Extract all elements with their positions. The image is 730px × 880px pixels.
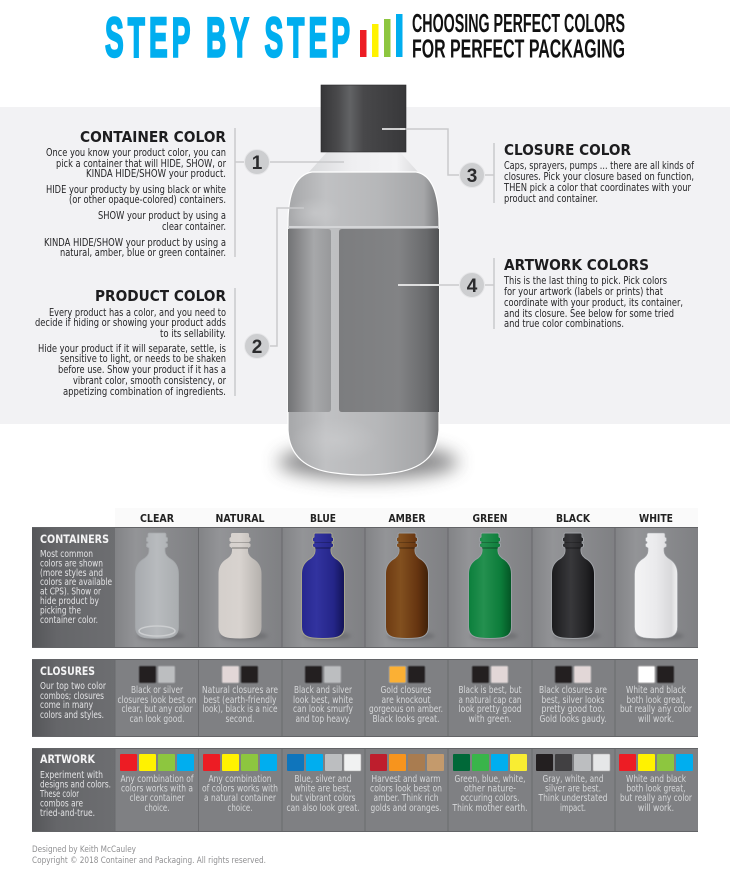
panel: closures row	[32, 659, 698, 737]
artwork cell: clear: Any combination of	[120, 774, 194, 785]
divider	[234, 288, 236, 396]
containers intro	[40, 532, 112, 626]
body text: product and container.	[504, 193, 598, 205]
callout lines	[235, 129, 494, 346]
column headers	[115, 508, 698, 527]
closure cell: white: White and black	[626, 685, 686, 696]
artwork cell: black: silver are best.	[545, 784, 601, 794]
body text: This is the last thing to pick. Pick colors	[503, 275, 667, 287]
right label	[339, 229, 439, 412]
artwork cell: amber	[370, 754, 444, 814]
artwork cell: amber: amber. Think rich	[374, 793, 438, 804]
body text: KINDA HIDE/SHOW your product.	[86, 168, 226, 180]
heading: ARTWORK COLORS	[504, 256, 649, 274]
closures intro: Our top two color	[40, 681, 106, 692]
closure cell: black	[539, 666, 607, 725]
closure cell: clear	[118, 666, 196, 725]
body text: KINDA HIDE/SHOW your product by using a	[44, 237, 226, 249]
body text: coordinate with your product, its container,	[504, 297, 683, 309]
containers intro: Most common	[40, 549, 93, 560]
artwork cell: clear: clear container	[130, 793, 185, 804]
body text: and its closure. See below for some tried	[504, 308, 674, 320]
column headers: BLACK	[556, 513, 591, 525]
artwork cell: blue	[286, 754, 361, 814]
body text	[44, 147, 227, 259]
closure cell: black: Gold looks gaudy.	[540, 714, 606, 725]
artwork cell: white: both look great,	[626, 784, 686, 794]
artwork cell: blue: Blue, silver and	[294, 774, 352, 785]
closure cell: blue	[293, 666, 353, 725]
artwork cell: green	[452, 754, 528, 814]
bottle illustration	[278, 85, 458, 479]
closure cell: blue: look best, white	[293, 695, 353, 706]
bottle neck	[309, 152, 418, 172]
artwork cell: white	[619, 754, 693, 814]
containers intro: picking the	[40, 606, 81, 616]
artwork intro: tried-and-true.	[40, 808, 95, 819]
closure cell: natural: second.	[226, 714, 254, 725]
artwork cell: white: White and black	[626, 774, 686, 785]
body text: before use. Show your product if it has a	[58, 364, 226, 376]
artwork cell: green: Think mother earth.	[452, 803, 528, 814]
body text: sensitive to light, or needs to be shaken	[60, 353, 226, 365]
artwork cell: amber: Harvest and warm	[372, 774, 440, 785]
closure cell: amber: gorgeous on amber.	[369, 704, 443, 715]
artwork cell: black	[536, 754, 610, 814]
artwork cell: clear: choice.	[144, 803, 170, 814]
icon: color bars	[360, 14, 402, 57]
closure cell: white: will work.	[638, 714, 674, 725]
bottle: amber	[386, 533, 435, 640]
closure cell: blue: can look smurfy	[293, 704, 353, 715]
column headers: WHITE	[639, 513, 673, 525]
bottle body	[288, 172, 439, 475]
closure cell: natural: best (earth-friendly	[204, 695, 277, 706]
bottle: white	[634, 533, 684, 640]
closure cell: white: both look great,	[626, 695, 686, 706]
body text: HIDE your producty by using black or white	[46, 184, 226, 196]
footer credits	[32, 845, 266, 866]
body text: for your artwork (labels or prints) that	[504, 286, 663, 298]
artwork cell: clear	[120, 754, 194, 814]
panel: container color	[44, 128, 270, 259]
artwork cell: natural: of colors works with	[202, 784, 278, 794]
closures intro: colors and styles.	[40, 710, 104, 721]
closure cell: green: Black is best, but	[458, 685, 522, 696]
subtitle	[412, 10, 625, 64]
marker 1	[244, 150, 270, 174]
marker 3: 3	[467, 166, 477, 187]
body text: decide if hiding or showing your product adds	[35, 317, 226, 329]
panel: product color	[35, 287, 270, 398]
heading: CONTAINER COLOR	[80, 128, 226, 146]
closure cell: blue: Black and silver	[294, 685, 352, 696]
artwork cell: blue: white are best,	[294, 784, 352, 794]
bottle: green	[468, 533, 518, 640]
containers intro: hide product by	[40, 596, 99, 607]
closure cell: amber: are knockout	[382, 695, 431, 706]
marker 4: 4	[467, 276, 478, 297]
artwork intro: ARTWORK	[40, 752, 96, 766]
body text: natural, amber, blue or green container.	[60, 247, 226, 259]
body text: clear container.	[162, 221, 226, 233]
closures intro: come in many	[40, 700, 93, 711]
artwork cell: white: but really any color	[620, 793, 692, 804]
body text: to its sellability.	[160, 328, 226, 340]
marker 3	[460, 162, 484, 188]
artwork intro: These color	[39, 789, 79, 800]
divider	[234, 128, 236, 257]
artwork cell: green: occuring colors.	[460, 793, 520, 804]
body text: (or other opaque-colored) containers.	[69, 194, 226, 206]
heading: PRODUCT COLOR	[95, 287, 226, 305]
body text: appetizing combination of ingredients.	[63, 386, 226, 398]
containers intro: at CPS). Show or	[40, 586, 101, 598]
containers intro: (more styles and	[40, 568, 103, 579]
column headers: NATURAL	[216, 513, 265, 525]
body text	[503, 275, 683, 330]
artwork cell: natural: a natural container	[204, 793, 276, 804]
containers intro: container color.	[40, 615, 98, 626]
bottle: clear	[136, 533, 185, 640]
artwork cell: amber: golds and oranges.	[370, 803, 442, 814]
body text	[35, 307, 227, 398]
artwork cell: amber: colors look best on	[370, 784, 442, 794]
artwork cell: green: Green, blue, white,	[454, 774, 526, 785]
closures intro	[40, 664, 106, 721]
closure cell: clear: Black or silver	[131, 685, 183, 696]
body text: Hide your product if it will separate, settle, is	[38, 343, 226, 355]
body text: Once you know your product color, you can	[46, 147, 226, 159]
panel: closure color	[460, 141, 694, 205]
closure cell: blue: and top heavy.	[296, 714, 350, 725]
divider	[493, 143, 495, 203]
closure cell: green	[458, 666, 522, 725]
heading: CLOSURE COLOR	[504, 141, 631, 159]
label band edge	[288, 226, 439, 228]
artwork cell: natural: Any combination	[208, 774, 272, 785]
body text: SHOW your product by using a	[98, 210, 226, 222]
artwork intro	[39, 752, 111, 819]
panel: artwork row	[32, 748, 698, 832]
artwork cell: green: other nature-	[464, 784, 516, 794]
title	[105, 7, 625, 69]
closure cell: clear: closures look best on	[118, 695, 196, 706]
containers intro: CONTAINERS	[40, 532, 109, 546]
divider	[493, 258, 495, 329]
body text: THEN pick a color that coordinates with your	[503, 182, 692, 194]
headline: STEP BY STEP	[105, 7, 350, 69]
bottle shadow	[278, 445, 458, 479]
body text	[503, 160, 694, 205]
body text: vibrant color, smooth consistency, or	[73, 375, 227, 387]
containers intro: colors are available	[40, 577, 112, 588]
column headers: CLEAR	[140, 513, 174, 525]
panel: anatomy band	[0, 107, 730, 424]
closure cell: green: with green.	[468, 714, 512, 725]
closure cell: black: best, silver looks	[542, 695, 605, 706]
artwork intro: designs and colors.	[40, 780, 111, 790]
artwork cell: black: impact.	[560, 803, 586, 814]
artwork cell: blue: but vibrant colors	[290, 793, 356, 804]
highlight	[289, 197, 341, 229]
closure cell: natural: Natural closures are	[202, 685, 278, 696]
marker 2: 2	[252, 337, 262, 358]
artwork intro: Experiment with	[40, 770, 103, 781]
panel: containers row	[32, 527, 698, 648]
closure cell: amber	[369, 666, 443, 725]
bottle: blue	[302, 533, 351, 640]
closure cell: white: but really any color	[620, 704, 692, 715]
closure cell: amber: Black looks great.	[372, 714, 440, 725]
column headers: GREEN	[472, 513, 508, 525]
footer credits: Designed by Keith McCauley	[32, 845, 136, 855]
artwork cell: blue: can also look great.	[286, 803, 360, 814]
closure cell: black: pretty good too.	[542, 704, 604, 715]
closure cell: natural: look), black is a nice	[202, 704, 278, 715]
closure cap	[321, 85, 406, 152]
artwork cell: black: Gray, white, and	[542, 774, 604, 785]
column headers: BLUE	[310, 513, 336, 525]
closures intro: combos; closures	[40, 691, 104, 702]
column headers: AMBER	[388, 513, 426, 525]
closure cell: clear: clear, but any color	[122, 704, 193, 715]
artwork cell: natural	[202, 754, 278, 814]
closure cell: natural	[202, 666, 278, 725]
containers intro: colors are shown	[40, 558, 103, 570]
bottle: black	[552, 533, 601, 640]
body text: Every product has a color, and you need to	[49, 307, 226, 319]
closure cell: green: a natural cap can	[458, 695, 522, 706]
left label	[288, 229, 331, 412]
marker 1: 1	[252, 153, 263, 174]
closure cell: white	[620, 666, 692, 725]
marker 4	[460, 272, 484, 298]
marker 2	[244, 334, 270, 358]
closures intro: CLOSURES	[40, 664, 95, 678]
artwork cell: natural: choice.	[228, 803, 252, 814]
closure cell: green: look pretty good	[458, 704, 522, 715]
artwork cell: clear: colors works with a	[121, 784, 193, 794]
artwork intro: combos are	[40, 798, 83, 810]
body text: pick a container that will HIDE, SHOW, or	[56, 158, 227, 170]
bottle: natural	[218, 533, 268, 640]
closure cell: amber: Gold closures	[380, 685, 432, 696]
body text: and true color combinations.	[504, 318, 624, 330]
artwork cell: black: Think understated	[538, 793, 608, 804]
panel: artwork colors	[460, 256, 683, 330]
footer credits: Copyright © 2018 Container and Packaging. All rights reserved.	[32, 856, 266, 866]
artwork cell: white: will work.	[638, 803, 674, 814]
closure cell: clear: can look good.	[130, 714, 184, 725]
closure cell: black: Black closures are	[539, 685, 607, 696]
